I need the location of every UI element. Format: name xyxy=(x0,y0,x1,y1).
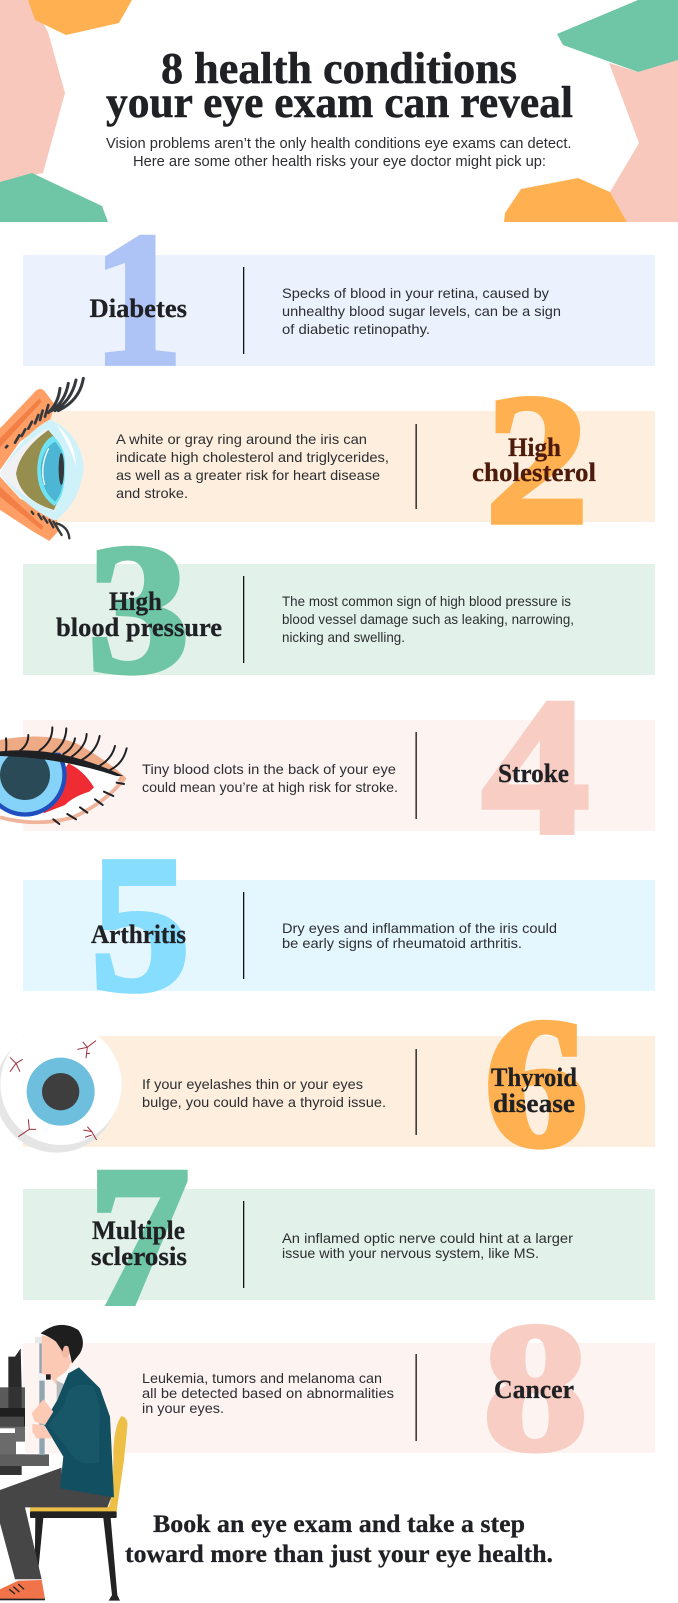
subtitle: Vision problems aren’t the only health conditions eye exams can detect. xyxy=(106,136,572,152)
text: thyroid disease xyxy=(142,1077,386,1110)
text: cancer: all be detected based on abnormalities xyxy=(142,1386,394,1401)
text: thyroid disease: bulge, you could have a thyroid issue. xyxy=(142,1095,386,1110)
panel: multiple sclerosis xyxy=(23,1126,655,1347)
heading: high cholesterol: cholesterol xyxy=(472,458,596,487)
text: stroke: could mean you’re at high risk for stroke. xyxy=(142,780,398,795)
panel: cancer xyxy=(23,1285,655,1489)
title: 8 health conditions xyxy=(161,44,517,93)
icon: side eye xyxy=(0,378,84,541)
panel: high blood pressure xyxy=(23,507,655,712)
panel: thyroid disease xyxy=(0,980,655,1185)
text: stroke: Tiny blood clots in the back of your eye xyxy=(142,762,396,777)
heading: stroke: Stroke xyxy=(498,759,569,788)
head xyxy=(41,1325,83,1385)
text: arthritis: be early signs of rheumatoid arthritis. xyxy=(282,936,522,951)
heading: high cholesterol xyxy=(472,433,596,487)
illustration: man at eye exam machine xyxy=(0,1325,127,1601)
heading: high cholesterol: High xyxy=(508,433,562,462)
trousers xyxy=(0,1468,112,1579)
text: diabetes xyxy=(282,286,561,337)
heading: multiple sclerosis: sclerosis xyxy=(91,1242,187,1271)
text: cancer: Leukemia, tumors and melanoma can xyxy=(142,1371,382,1386)
icon: eye with blood clot xyxy=(0,727,127,824)
text: cancer: in your eyes. xyxy=(142,1401,224,1416)
panel: high cholesterol xyxy=(0,357,655,563)
closing line xyxy=(125,1511,553,1568)
title xyxy=(106,44,573,127)
text: stroke xyxy=(142,762,398,795)
closing line: toward more than just your eye health. xyxy=(125,1541,553,1568)
number 8: 8 xyxy=(483,1285,588,1489)
heading: multiple sclerosis xyxy=(91,1216,187,1271)
text: high blood pressure xyxy=(282,594,574,645)
shirt xyxy=(57,1365,79,1385)
heading: high blood pressure: High xyxy=(109,587,163,616)
title: your eye exam can reveal xyxy=(106,78,573,127)
text: high cholesterol: A white or gray ring around the iris can xyxy=(116,432,367,447)
text: high cholesterol xyxy=(116,432,389,501)
number 1: 1 xyxy=(93,194,182,404)
heading: high blood pressure xyxy=(56,587,222,642)
header shapes xyxy=(0,0,678,222)
panel: diabetes xyxy=(23,194,655,404)
subtitle: Here are some other health risks your eye doctor might pick up: xyxy=(133,154,546,170)
text: high cholesterol: as well as a greater risk for heart disease xyxy=(116,468,380,483)
text: high cholesterol: and stroke. xyxy=(116,486,188,501)
closing line: Book an eye exam and take a step xyxy=(153,1511,525,1538)
text: high blood pressure: blood vessel damage such as leaking, narrowing, xyxy=(282,612,574,627)
text: arthritis xyxy=(282,921,557,951)
heading: thyroid disease: Thyroid xyxy=(491,1063,578,1092)
number 3: 3 xyxy=(88,507,189,712)
text: diabetes: Specks of blood in your retina, caused by xyxy=(282,286,549,301)
text: cancer xyxy=(142,1371,394,1416)
heading: cancer: Cancer xyxy=(494,1375,574,1404)
jacket xyxy=(43,1367,114,1497)
heading: multiple sclerosis: Multiple xyxy=(92,1216,185,1245)
number 4: 4 xyxy=(482,659,589,875)
panel: arthritis xyxy=(23,816,655,1031)
text: arthritis: Dry eyes and inflammation of the iris could xyxy=(282,921,557,936)
text: thyroid disease: If your eyelashes thin or your eyes xyxy=(142,1077,363,1092)
text: high cholesterol: indicate high cholesterol and triglycerides, xyxy=(116,450,389,465)
heading: high blood pressure: blood pressure xyxy=(56,613,222,642)
subtitle xyxy=(106,136,572,170)
number 2: 2 xyxy=(486,357,588,563)
text: multiple sclerosis: An inflamed optic nerve could hint at a larger xyxy=(282,1231,574,1246)
number 6: 6 xyxy=(484,980,588,1185)
text: diabetes: of diabetic retinopathy. xyxy=(282,322,430,337)
text: multiple sclerosis xyxy=(282,1231,574,1261)
icon: bulging eyeball xyxy=(0,1024,122,1153)
text: high blood pressure: The most common sign of high blood pressure is xyxy=(282,594,571,609)
number 5: 5 xyxy=(91,816,190,1031)
heading: arthritis: Arthritis xyxy=(91,920,186,949)
eye exam machine xyxy=(0,1337,53,1475)
text: multiple sclerosis: issue with your nervous system, like MS. xyxy=(282,1246,539,1261)
text: high blood pressure: nicking and swelling. xyxy=(282,630,405,645)
heading: diabetes: Diabetes xyxy=(90,294,187,323)
hands xyxy=(32,1399,53,1438)
chair xyxy=(30,1416,127,1601)
panel: stroke xyxy=(0,659,655,875)
shoe xyxy=(0,1580,45,1600)
number 7: 7 xyxy=(89,1126,190,1347)
heading: thyroid disease xyxy=(491,1063,578,1118)
text: diabetes: unhealthy blood sugar levels, can be a sign xyxy=(282,304,561,319)
heading: thyroid disease: disease xyxy=(493,1089,575,1118)
